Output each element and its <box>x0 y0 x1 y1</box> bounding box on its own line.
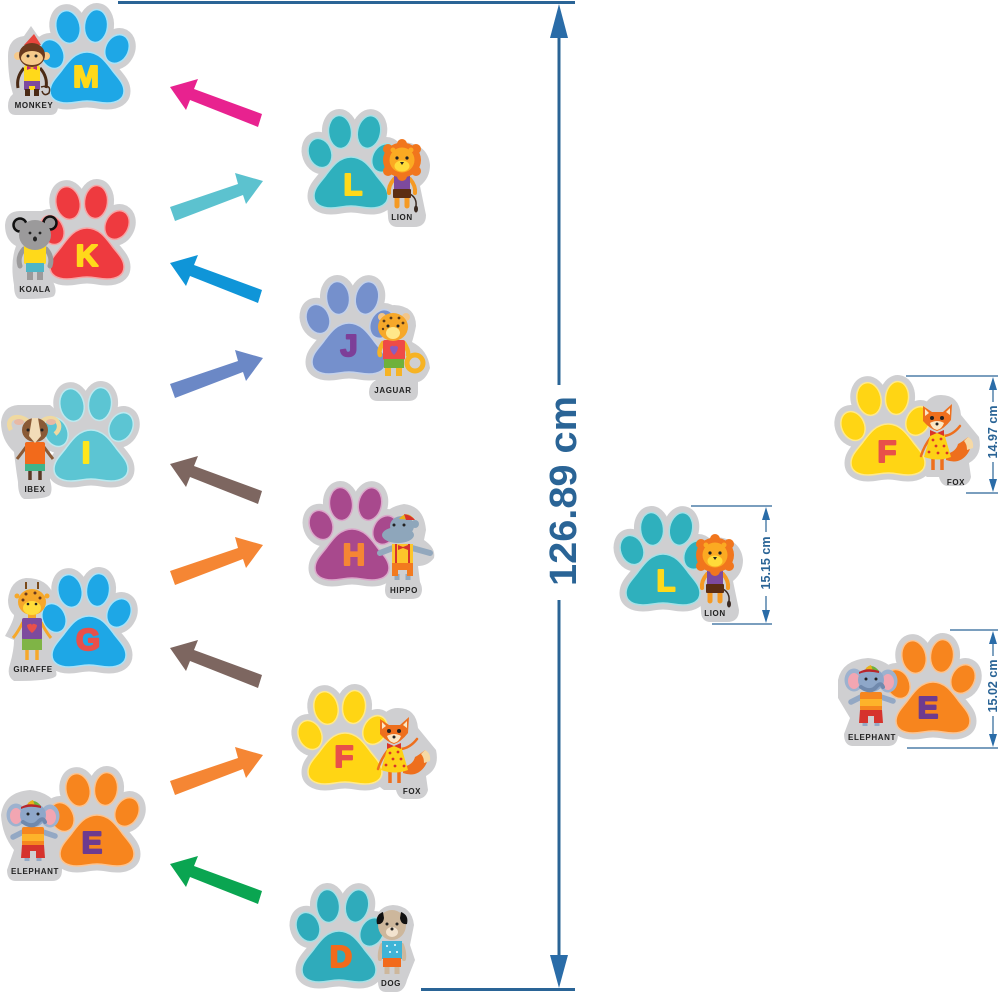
label: FOX: FOX <box>403 787 421 796</box>
sticker: F fox, measured <box>836 380 980 487</box>
letter G: G <box>76 622 100 657</box>
icon: elephant <box>6 800 60 861</box>
arrow: brown pointing to G <box>170 640 262 688</box>
icon: fox <box>921 404 973 470</box>
label: DOG: DOG <box>381 979 401 988</box>
label: GIRAFFE: GIRAFFE <box>13 665 53 674</box>
dimension: lion 15.15 cm <box>691 506 773 624</box>
icon: hippo <box>380 514 430 580</box>
label: LION: LION <box>391 213 413 222</box>
letter F: F <box>335 739 353 774</box>
letter I: I <box>82 435 90 470</box>
sticker: G giraffe <box>5 572 136 681</box>
icon: jaguar <box>378 313 423 376</box>
sticker: I ibex <box>1 386 138 499</box>
sticker: F fox <box>293 689 437 799</box>
icon: elephant <box>844 665 898 726</box>
label: HIPPO: HIPPO <box>390 586 418 595</box>
letter D: D <box>330 939 352 974</box>
label: LION: LION <box>704 609 726 618</box>
sticker: E elephant <box>1 771 144 881</box>
arrow: magenta pointing to M <box>170 79 262 127</box>
letter K: K <box>76 238 99 273</box>
dimension: fox 14.97 cm <box>906 376 1000 493</box>
letter E: E <box>82 825 102 860</box>
sticker: D dog <box>292 887 415 992</box>
icon: koala <box>14 216 56 280</box>
dimension: elephant 15.02 cm: 15.02 cm <box>986 660 1000 712</box>
sticker: H hippo <box>305 485 434 599</box>
label: FOX: FOX <box>947 478 965 487</box>
label: JAGUAR: JAGUAR <box>374 386 412 395</box>
letter J: J <box>340 328 358 363</box>
letter E: E <box>918 690 938 725</box>
letter L: L <box>657 563 675 598</box>
label: ELEPHANT: ELEPHANT <box>848 733 896 742</box>
icon: lion <box>383 139 421 212</box>
arrow: orange pointing to H <box>170 537 263 585</box>
arrow: blue pointing to K <box>170 255 262 303</box>
letter H: H <box>343 537 365 572</box>
icon: lion <box>696 534 734 608</box>
sticker: J jaguar <box>302 279 430 401</box>
letter F: F <box>878 434 896 469</box>
icon: giraffe <box>13 582 51 660</box>
icon: monkey <box>14 34 50 96</box>
letter M: M <box>73 59 99 94</box>
icon: dog <box>377 910 407 974</box>
dimension: elephant 15.02 cm <box>907 630 1000 748</box>
label: IBEX: IBEX <box>24 485 46 494</box>
sticker: M monkey <box>8 8 134 115</box>
dimension: total height 126.89 cm: 126.89 cm <box>543 396 585 586</box>
icon: ibex <box>9 417 59 480</box>
arrow: brown pointing to I <box>170 456 262 504</box>
sticker: L lion <box>304 113 430 227</box>
icon: fox <box>378 717 430 783</box>
arrow: teal pointing to L <box>170 173 263 221</box>
sticker: L lion, measured <box>616 510 743 622</box>
letter L: L <box>344 167 362 202</box>
sticker: E elephant, measured <box>838 638 980 746</box>
label: MONKEY: MONKEY <box>15 101 53 110</box>
arrow: orange pointing to F <box>170 747 263 795</box>
sticker: K koala <box>5 184 134 299</box>
arrow: periwinkle pointing to J <box>170 350 263 398</box>
label: KOALA: KOALA <box>19 285 51 294</box>
dimension: lion 15.15 cm: 15.15 cm <box>759 536 773 590</box>
label: ELEPHANT: ELEPHANT <box>11 867 59 876</box>
dimension: total height 126.89 cm <box>118 2 585 990</box>
dimension: fox 14.97 cm: 14.97 cm <box>986 406 1000 458</box>
arrow: green pointing to E <box>170 856 262 904</box>
